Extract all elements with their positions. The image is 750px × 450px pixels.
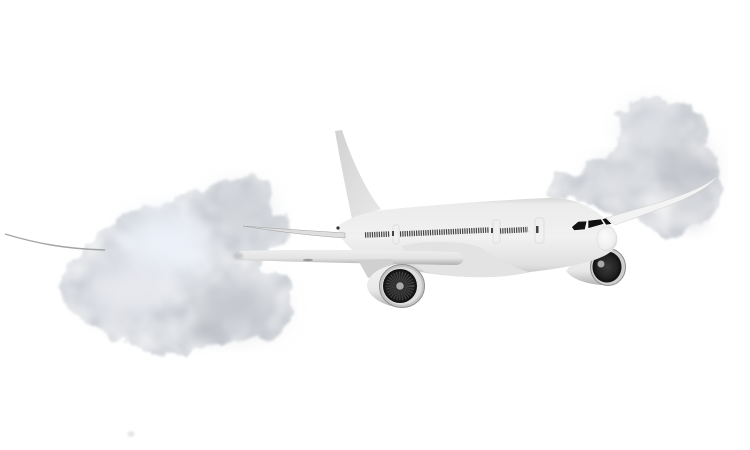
- flap fairing: [303, 259, 313, 261]
- faint cloud wisp: [128, 432, 134, 436]
- far wing: [606, 175, 719, 225]
- near wing tip: [5, 234, 105, 250]
- cockpit windows: [572, 218, 612, 230]
- right cloud: [548, 98, 719, 236]
- nose cone: [597, 227, 617, 251]
- fan: [383, 269, 417, 303]
- far engine: [566, 248, 626, 286]
- fan blades: [390, 276, 410, 296]
- tail tip: [336, 226, 340, 230]
- door outlines: [393, 218, 544, 244]
- far tailplane: [243, 226, 345, 238]
- wing root bump in cloud: [233, 252, 243, 260]
- fuselage: [336, 198, 617, 277]
- engine intake ring: [380, 264, 424, 308]
- near engine: [358, 259, 424, 308]
- left cloud: [60, 178, 292, 353]
- passenger windows: [365, 230, 528, 235]
- engine cowl: [367, 264, 404, 308]
- single windows: [392, 226, 538, 236]
- wing root fairing: [402, 242, 528, 277]
- near wing: [233, 250, 464, 265]
- tail fin: [335, 130, 381, 219]
- pylon: [358, 259, 395, 278]
